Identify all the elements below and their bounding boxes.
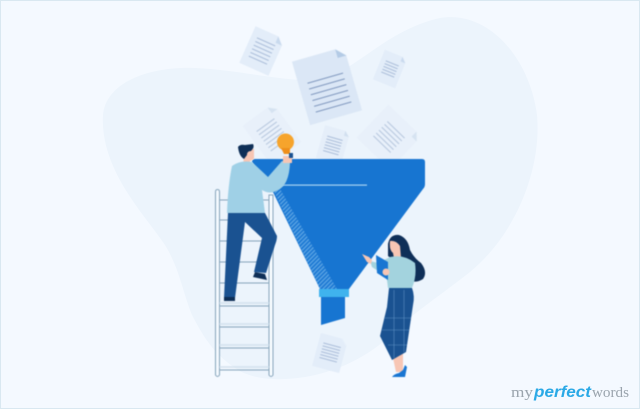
man climbing ladder <box>224 134 294 301</box>
man hand <box>283 156 292 163</box>
document: top right <box>373 50 407 88</box>
funnel body <box>252 159 425 289</box>
woman shoe <box>392 365 407 377</box>
logo: my <box>511 385 534 401</box>
icon: light bulb <box>277 134 294 158</box>
man sweater <box>227 161 290 213</box>
woman trousers <box>380 288 414 360</box>
woman face <box>390 241 401 258</box>
background blob <box>103 17 538 379</box>
woman with book <box>362 235 425 377</box>
funnel rim highlight <box>268 184 367 186</box>
logo: perfect <box>533 384 592 401</box>
woman hair <box>388 235 425 282</box>
document: right low <box>356 104 422 170</box>
man shoes <box>224 272 267 301</box>
logo: words <box>592 385 629 401</box>
document: large centre <box>292 47 362 125</box>
woman sweater <box>370 256 416 288</box>
funnel <box>252 159 425 325</box>
woman pointing hand <box>362 254 372 264</box>
ladder <box>216 190 273 376</box>
funnel spout <box>321 297 345 325</box>
woman holding hand <box>382 268 390 276</box>
woman legs <box>393 352 403 372</box>
document: centre low <box>316 125 350 165</box>
funnel neck <box>319 289 349 297</box>
man trousers <box>224 213 277 298</box>
open book <box>376 255 388 280</box>
document: behind man <box>243 103 301 165</box>
man face <box>243 149 254 165</box>
logo <box>511 384 629 401</box>
funnel hatched shade <box>272 187 337 289</box>
document: below spout <box>312 333 348 373</box>
man hair <box>238 144 254 159</box>
document: top left <box>239 26 285 76</box>
